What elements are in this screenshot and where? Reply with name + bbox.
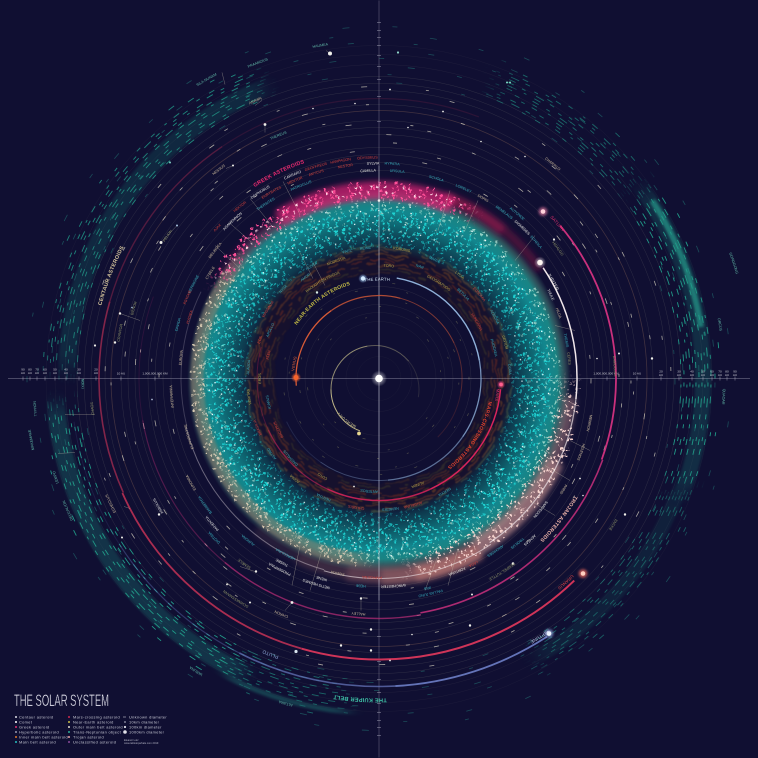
planet: Mars [498, 381, 504, 388]
distance scale labels: AU [28, 371, 32, 375]
asteroid names: inner main belt: EUNOMIA [472, 286, 487, 303]
asteroid names: around main belt outer edge: EUNOMIA [185, 474, 197, 491]
heading: Centaur asteroids: CENTAUR ASTEROIDS [98, 246, 124, 305]
asteroid names: around main belt outer edge: AENEAS [522, 533, 537, 547]
main asteroid belt [126, 127, 632, 634]
asteroid names: inner main belt: APOLLO [265, 322, 275, 338]
Kuiper belt clump: right [620, 172, 720, 496]
inner system faint streaks [244, 243, 514, 514]
asteroid names: inner main belt: FAEL [342, 248, 352, 255]
asteroid names: around main belt outer edge: DEIPHOBUS [250, 186, 270, 199]
distance scale labels: 1,000,000,000 KM [142, 372, 168, 376]
planet labels: JUPITER [548, 274, 559, 290]
distance scale labels: 30 [77, 368, 81, 372]
asteroid names: inner main belt: GEOGRAPHOS [426, 274, 452, 293]
asteroid names: around main belt outer edge: MENTOR [287, 176, 302, 185]
distance scale labels: AU [21, 371, 25, 375]
asteroid names: inner main belt: REINE [359, 246, 372, 251]
asteroid names: inner main belt: LYDIA [454, 270, 465, 280]
distance scale labels: 40 [690, 370, 694, 374]
asteroid names: around main belt outer edge: GEOFFREUS [304, 162, 327, 171]
asteroid names: inner main belt: KORONIS [393, 246, 411, 253]
Kuiper belt clump: upper left [38, 68, 276, 380]
planet labels: THE EARTH [364, 278, 390, 282]
asteroid names: centaurs and outer objects: ARAWN [248, 96, 263, 105]
heading: Mars-crossing asteroids: MARS-CROSSING ASTEROIDS [448, 402, 492, 470]
distance scale labels: 60 [710, 370, 714, 374]
asteroid names: inner main belt: AMOR [300, 272, 312, 282]
asteroid names: inner main belt: PHOCAEA [489, 338, 498, 358]
asteroid names: around main belt outer edge: PATIENTIA [204, 515, 220, 532]
asteroid names: inner main belt: VERITAS [246, 388, 253, 405]
planet: Uranus [579, 569, 587, 578]
distance scale labels: 10 AU [117, 372, 125, 376]
distance scale labels: AU [733, 373, 737, 377]
asteroid names: around main belt outer edge: CYBELE [206, 266, 215, 280]
asteroid names: around main belt outer edge: ANCHISES [486, 544, 504, 558]
distance scale labels: 40 [64, 368, 68, 372]
belt base glow [187, 188, 571, 572]
asteroid names: around main belt outer edge: DIOTIMA [207, 530, 221, 545]
asteroid names: around main belt outer edge: HELENOS [576, 443, 586, 462]
distance scale labels: 80 [28, 368, 32, 372]
asteroid names: around main belt outer edge: THEMIS [563, 333, 570, 348]
inner main belt streaks [212, 212, 546, 545]
distance scale labels [21, 368, 737, 377]
asteroid names: centaurs and outer objects: GONGGONG [728, 252, 739, 275]
heading: The Kuiper belt: THE KUIPER BELT [333, 696, 387, 702]
legend column 3: 10km diameter [129, 719, 160, 724]
asteroid names: inner main belt [246, 246, 512, 511]
asteroid names: centaurs and outer objects: ASBOLUS [152, 497, 164, 515]
distance scale labels: 50 [53, 368, 57, 372]
Greek swarm dots [206, 181, 483, 294]
planet: Earth [359, 275, 367, 282]
asteroid names: centaurs and outer objects: PRAAMZIUS [247, 57, 269, 69]
distance scale labels: AU [677, 373, 681, 377]
asteroid names: inner main belt: MERXIA [437, 486, 452, 498]
asteroid names: inner main belt: MASSALIA [261, 300, 275, 318]
asteroid names: around main belt outer edge: METIS HERMES [301, 577, 330, 590]
legend column 2: Outer main belt asteroid [73, 724, 123, 729]
asteroid names: around main belt outer edge: AMYCUS [309, 170, 324, 176]
asteroid names: around main belt outer edge: INTERAMNIA [169, 384, 175, 408]
asteroid names: inner main belt: NYSA [278, 284, 289, 294]
distance scale labels: 20 [94, 368, 98, 372]
Sun [371, 370, 387, 386]
asteroid names: inner main belt: ATEN [266, 350, 272, 360]
asteroid names: around main belt outer edge: DORIS [477, 194, 490, 203]
planet labels: MERCURY [337, 412, 356, 428]
asteroid names: around main belt outer edge: THERSITES [256, 198, 275, 210]
legend column 3: 100km diameter [129, 724, 162, 729]
asteroid names: centaurs and outer objects: TEMPEL-TUTTLE [487, 561, 516, 582]
planet: Venus [292, 373, 300, 382]
asteroid names: centaurs and outer objects: MAKEMAKE [27, 429, 35, 450]
distance scale labels: AU [53, 371, 57, 375]
asteroid names: around main belt outer edge: PAPAGENA [362, 575, 382, 580]
asteroid names: centaurs and outer objects: ALTJIRA [278, 699, 293, 707]
asteroid names: around main belt outer edge: CAMILLA [360, 168, 376, 172]
asteroid names: inner main belt: MARIA [428, 255, 441, 264]
asteroid names: around main belt outer edge: SARPEDON [532, 500, 549, 519]
distance scale labels: 20 [659, 370, 663, 374]
asteroid names: centaurs and outer objects: ENCKE [608, 518, 618, 532]
leader lines [58, 50, 590, 610]
large asteroid and dwarf planet markers [94, 51, 653, 661]
distance scale labels: 30 [677, 370, 681, 374]
legend column 1: Inner main belt asteroid [19, 734, 68, 739]
title: THE SOLAR SYSTEM [14, 691, 109, 710]
asteroid names: around main belt outer edge: DIOMEDES [513, 219, 531, 236]
asteroid names: around main belt outer edge: SCHOLA [428, 175, 445, 183]
asteroid names: inner main belt: CHLORIS [347, 504, 365, 511]
distance scale labels: AU [701, 373, 705, 377]
planet: Neptune [545, 629, 553, 638]
asteroid names: inner main belt: FLORA [305, 261, 318, 271]
asteroid names: around main belt outer edge: TROILUS [509, 536, 525, 550]
Trojan swarm base band [113, 113, 649, 648]
asteroid names: around main belt outer edge: EUPHROSYNE [183, 423, 195, 450]
legend column 1: Comet [19, 719, 33, 724]
asteroid names: centaurs and outer objects: SEMELE [237, 557, 252, 570]
Trojan asteroids [254, 372, 582, 589]
legend column 3: Unknown diameter [129, 714, 167, 719]
asteroid names: centaurs and outer objects: DAMOCLES [612, 356, 617, 377]
asteroid names: around main belt outer edge: BAMBERGA [197, 495, 213, 515]
asteroid names: around main belt outer edge: HYPATIA [384, 162, 400, 166]
asteroid names: inner main belt: HERTHA [315, 492, 332, 502]
legend column 3 [123, 714, 167, 734]
distance scale labels: 1,000,000,000 KM [593, 372, 619, 376]
planetary orbit: Mercury [313, 328, 437, 451]
asteroid names: centaurs and outer objects: VARUNA [188, 665, 204, 677]
asteroid names: inner main belt: ICARUS [265, 394, 272, 409]
legend column 2: Mars-crossing asteroid [73, 714, 120, 719]
distance scale labels: 70 [718, 370, 722, 374]
credit: www.tabletopwhale.com 2019 [124, 741, 159, 745]
asteroid names: around main belt outer edge: AGAMEMNON [223, 212, 242, 231]
asteroid names: inner main belt: HUNGARIA [470, 312, 484, 332]
asteroid names: inner main belt: EROS [258, 373, 262, 384]
legend column 2 [68, 714, 123, 744]
heading: Near-Earth asteroids: NEAR-EARTH ASTEROIDS [294, 282, 350, 325]
asteroid names: centaurs and outer objects: HALLEY [351, 611, 366, 616]
Greek asteroids [206, 177, 545, 294]
distance scale labels: 50 [701, 370, 705, 374]
planet labels: NEPTUNE [530, 630, 550, 644]
asteroid names: around main belt outer edge [170, 156, 592, 598]
legend column 1: Main belt asteroid [19, 739, 56, 744]
asteroid names: around main belt outer edge: IRIS [423, 585, 431, 591]
legend column 3: 1000km diameter [129, 729, 165, 734]
asteroid names: centaurs and outer objects: CRANTOR [116, 323, 124, 342]
Kuiper belt clump: left [47, 392, 258, 682]
asteroid names: around main belt outer edge: PALLAS JUNO [418, 588, 443, 598]
asteroid names: around main belt outer edge: THULE [546, 288, 555, 302]
planet labels: MARS [495, 389, 500, 401]
asteroid names: around main belt outer edge: CERES [566, 352, 572, 366]
asteroid names: centaurs and outer objects: SILA-NUNAM [196, 72, 217, 87]
asteroid names: inner main belt: ASTRID [266, 447, 277, 460]
asteroid names: around main belt outer edge: HILDA [555, 307, 562, 320]
asteroid names: around main belt outer edge: NESTOR [338, 164, 353, 168]
legend column 2: Trans-Neptunian object [73, 729, 122, 734]
asteroid names: around main belt outer edge: IRENE [315, 575, 328, 582]
legend column 1 [15, 714, 68, 744]
asteroid names: centaurs and outer objects: TYPHON [33, 400, 38, 416]
asteroid names: inner main belt: BROUGHTON [305, 276, 328, 294]
legend column 1: Centaur asteroid [19, 714, 53, 719]
legend [15, 714, 167, 745]
distance scale labels: 70 [35, 368, 39, 372]
asteroid names: around main belt outer edge: CARRARO [284, 170, 301, 180]
distance scale labels: 90 [21, 368, 25, 372]
asteroid names: centaurs and outer objects: LEMPO [52, 470, 60, 484]
asteroid names: around main belt outer edge: URSULA [390, 169, 404, 173]
asteroid names: centaurs and outer objects: CHAOS [90, 401, 95, 415]
credit: Eleanor Lutz [124, 739, 139, 742]
asteroid names: inner main belt: EOS [257, 335, 263, 344]
asteroid names: around main belt outer edge: WINCHESTER [381, 583, 406, 589]
asteroid names: inner main belt: BACCHUS [272, 420, 285, 439]
asteroid names: centaurs and outer objects: CHIRON [274, 609, 289, 619]
asteroid names: inner main belt: IVAR [415, 263, 425, 270]
distance scale labels: AU [35, 371, 39, 375]
asteroid names: around main belt outer edge: PARIS [558, 484, 568, 495]
heading: Trojan asteroids: TROJAN ASTEROIDS [540, 496, 578, 542]
Kuiper belt clump: top right [482, 60, 648, 196]
asteroid names: centaurs and outer objects: ECHECLUS [104, 493, 117, 514]
asteroid names: around main belt outer edge: PROSERPINA [268, 561, 292, 577]
asteroid names: around main belt outer edge: MENELAUS [495, 205, 514, 221]
teal asteroid dots [149, 151, 609, 610]
planetary orbit: Venus [263, 263, 495, 494]
asteroid names: inner main belt: ALAUDA [246, 359, 251, 375]
distance scale labels: 90 [733, 370, 737, 374]
distance scale labels: AU [718, 373, 722, 377]
asteroid names: inner main belt: ANGELINA [403, 500, 423, 510]
asteroid names: inner main belt: ALINDA [410, 480, 425, 489]
asteroid names: inner main belt: FRIGGA [326, 270, 341, 280]
planetary orbit: Neptune [71, 70, 687, 686]
outer main belt beige edge [189, 252, 378, 568]
legend column 1: Hyperbolic asteroid [19, 729, 59, 734]
short white asteroid streaks [87, 86, 671, 670]
asteroid names: around main belt outer edge: AUTONOE [509, 206, 526, 222]
distance scale labels: AU [64, 371, 68, 375]
asteroid names: around main belt outer edge: FORTUNA [447, 566, 466, 577]
asteroid names: around main belt outer edge: MELIBOEA [208, 242, 222, 258]
asteroid names: inner main belt: CUYO [317, 472, 328, 481]
planet: Saturn [539, 207, 547, 216]
planetary orbit: Mars [217, 216, 541, 541]
distance scale labels: AU [659, 373, 663, 377]
Kuiper belt clump: bottom [220, 650, 360, 715]
distance scale labels: AU [43, 371, 47, 375]
asteroid names: inner main belt: BRASILIA [252, 418, 263, 436]
asteroid names: around main belt outer edge: LEDA [468, 560, 479, 568]
asteroid names: centaurs and outer objects: IXION [81, 378, 85, 389]
asteroid names: centaurs and outer objects: PELION [162, 229, 173, 243]
asteroid names: inner main belt: BETULIA [456, 287, 470, 302]
distance scale labels: 60 [43, 368, 47, 372]
asteroid names: around main belt outer edge: HERMIONE [188, 274, 199, 294]
asteroid names: around main belt outer edge: LORELEY [455, 183, 473, 194]
asteroid names: around main belt outer edge: SCHEILA [529, 235, 543, 250]
asteroid names: centaurs and outer objects: THEREUS [269, 130, 288, 141]
asteroid names: around main belt outer edge: PSYCHE [183, 290, 192, 304]
legend column 2: Unclassified asteroid [73, 739, 116, 744]
distance scale labels: AU [690, 373, 694, 377]
asteroid names: centaurs and outer objects: HIDALGO [551, 241, 564, 257]
asteroid names: inner main belt: ADEONA [489, 309, 500, 326]
distance scale labels: AU [77, 371, 81, 375]
heading: Greek asteroids: GREEK ASTEROIDS [254, 160, 304, 186]
asteroid names: centaurs and outer objects: SCHWASSMANN [222, 589, 249, 609]
asteroid names: centaurs and outer objects: NESSUS [212, 163, 227, 176]
asteroid names: around main belt outer edge: EURYBATES [262, 186, 282, 199]
asteroid names: around main belt outer edge: SYLVIA [366, 162, 380, 165]
planet labels: PLUTO [262, 650, 278, 659]
planet labels: SATURN [550, 216, 564, 231]
Trojan swarm dots [398, 372, 582, 580]
asteroid names: inner main belt: ANTEROS [359, 488, 378, 494]
faint asteroid and comet orbits [46, 46, 712, 712]
legend column 2: Near-Earth asteroid [73, 719, 114, 724]
distance scale labels: 10 AU [633, 372, 641, 376]
asteroid names: inner main belt: TORO [383, 263, 394, 269]
asteroid names: centaurs and outer objects: QUAOAR [721, 388, 726, 405]
legend column 2: Trojan asteroid [73, 734, 104, 739]
bright sparkle dots [133, 134, 625, 627]
asteroid names: inner main belt: NEMESIS [381, 506, 399, 512]
planet: Mercury [357, 432, 361, 435]
asteroid names: around main belt outer edge: DAVIDA [175, 318, 181, 332]
asteroid names: around main belt outer edge: THISBE [275, 557, 289, 567]
planetary orbit: Earth [237, 236, 521, 521]
asteroid names: around main belt outer edge: EGERIA [330, 569, 345, 577]
planetary orbit: Saturn [139, 138, 619, 618]
planet: Jupiter [534, 256, 546, 268]
planet labels: URANUS [558, 575, 574, 590]
asteroid names: inner main belt: MODESTIA [326, 256, 347, 267]
distance scale labels: AU [710, 373, 714, 377]
asteroid names: around main belt outer edge: ODYSSEUS [357, 156, 378, 160]
planetary orbit: Uranus [98, 98, 660, 660]
asteroid names: centaurs and outer objects: BIENOR [130, 301, 138, 316]
asteroid names: around main belt outer edge: HARPAGON [330, 158, 351, 164]
asteroid names: around main belt outer edge: AURORA [240, 533, 256, 547]
asteroid names: around main belt outer edge: HEKTOR [233, 201, 246, 212]
legend column 1: Greek asteroid [19, 724, 49, 729]
asteroid names: centaurs and outer objects: HAUMEA [312, 42, 329, 49]
asteroid names: around main belt outer edge: HEBE [355, 583, 366, 588]
planet: Pluto [294, 650, 298, 653]
pale asteroid dots [126, 127, 632, 634]
planet labels [262, 216, 574, 659]
asteroid names: inner main belt: DORA [507, 364, 512, 375]
asteroid names: around main belt outer edge: MEMNON [585, 414, 593, 432]
asteroid names: around main belt outer edge: HERCULINA [275, 547, 296, 561]
asteroid names: inner main belt: GEFION [501, 335, 509, 350]
distance scale labels: 80 [725, 370, 729, 374]
distance scale labels: AU [94, 371, 98, 375]
distance scale labels: AU [725, 373, 729, 377]
asteroid names: around main belt outer edge: HYGIEA [186, 310, 193, 324]
asteroid names: inner main belt: DAEDALUS [282, 449, 299, 467]
asteroid names: inner main belt: AGNIA [289, 473, 301, 484]
asteroid names: around main belt outer edge: PATROCLUS [290, 180, 312, 191]
asteroid names: centaurs and outer objects: DEUCALION [62, 500, 74, 521]
asteroid names: centaurs and outer objects: ORCUS [717, 318, 723, 332]
Greek swarm base band [106, 105, 652, 652]
asteroid names: around main belt outer edge: EUROPA [178, 350, 183, 366]
asteroid names: around main belt outer edge: AJAX [214, 224, 222, 232]
planet labels: VENUS [292, 356, 297, 371]
asteroid names: centaurs and outer objects: CHARIKLO [544, 157, 561, 172]
Kuiper belt clump: lower right [526, 474, 703, 676]
planetary orbit: Jupiter [101, 101, 657, 656]
